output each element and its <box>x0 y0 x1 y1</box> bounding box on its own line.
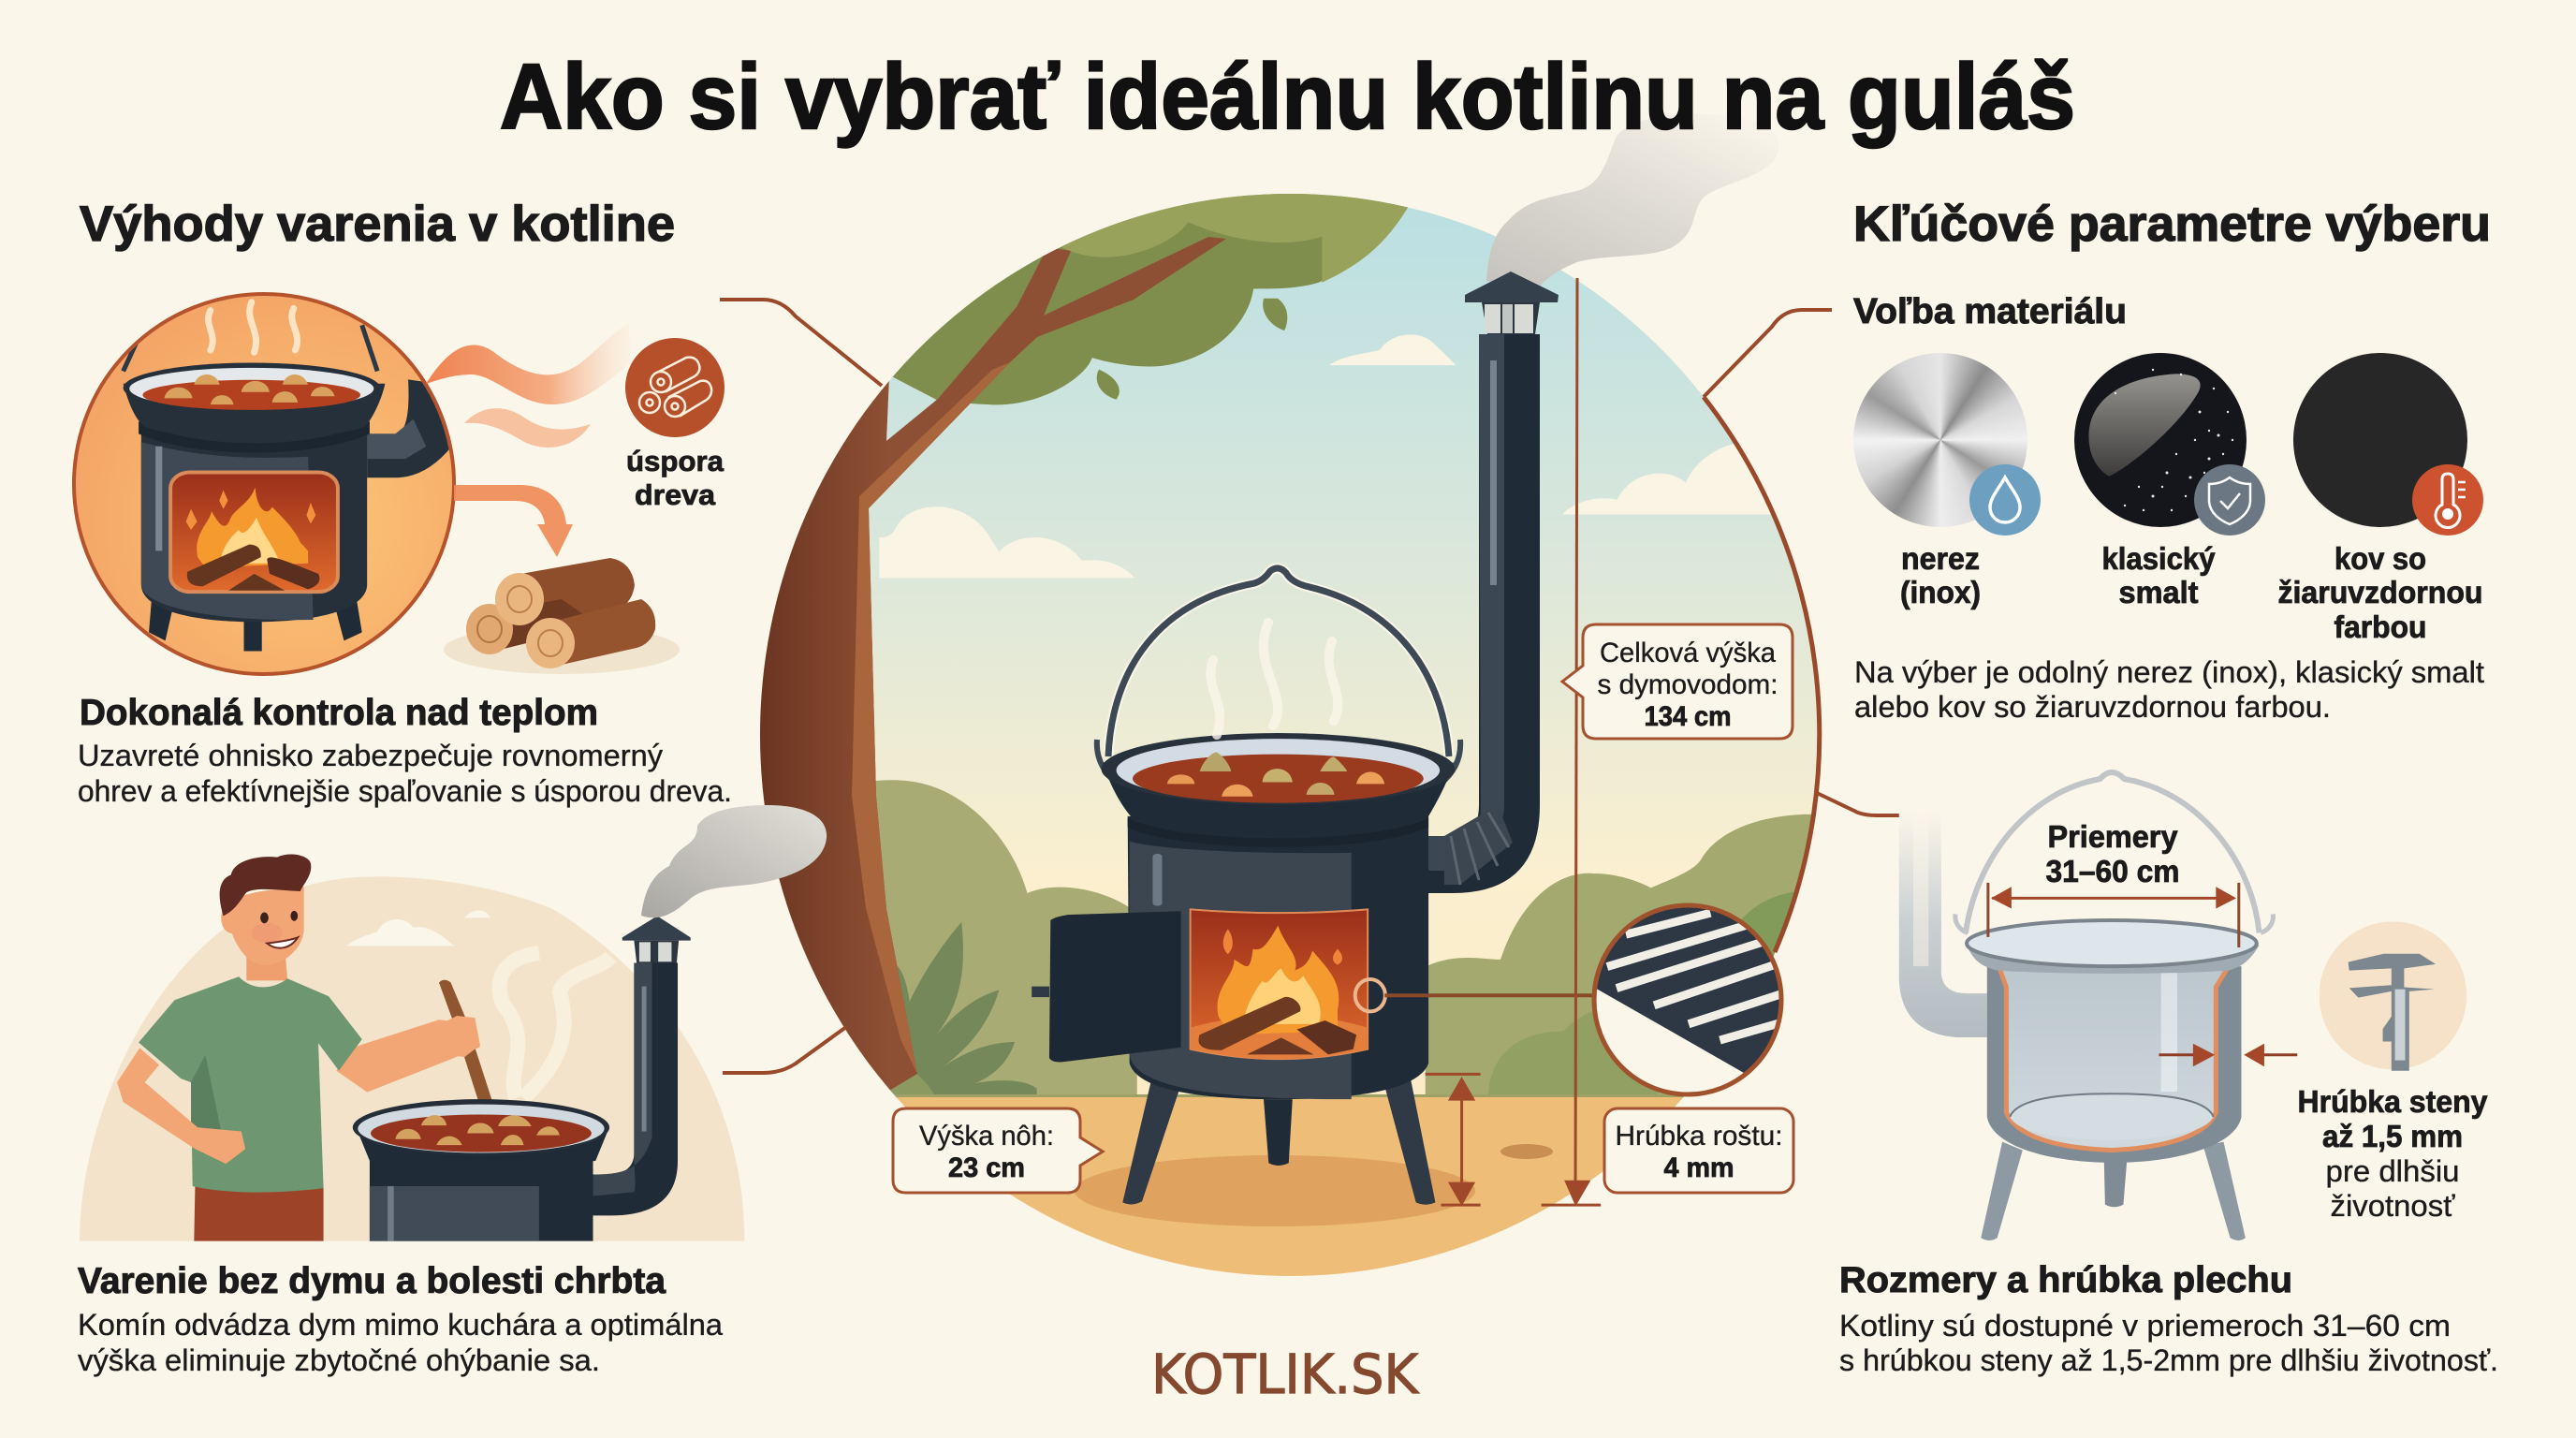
bail handle <box>1966 772 2260 932</box>
callout: grate thickness <box>1604 1108 1793 1193</box>
face <box>221 887 304 965</box>
text: heat control: Uzavreté ohnisko zabezpečuje rovnomerný <box>78 739 663 772</box>
legs <box>1981 1142 2246 1240</box>
bail handles <box>124 325 377 371</box>
label: wood saving: úspora <box>626 445 724 477</box>
labels: materials: kov so <box>2334 541 2426 576</box>
labels: materials: žiaruvzdornou <box>2278 575 2482 609</box>
tree canopy <box>889 188 1410 404</box>
backdrop dome <box>80 876 744 1241</box>
ghost chimney <box>1899 812 1987 1037</box>
chimney stub <box>367 379 452 477</box>
heading: heat control: Dokonalá kontrola nad teplom <box>80 693 598 733</box>
neck <box>246 946 287 980</box>
panel: central scene <box>720 114 1902 1284</box>
bowl <box>124 384 386 433</box>
heading: left column: Výhody varenia v kotline <box>80 197 675 252</box>
text: material choice: Na výber je odolný nerez (inox), klasický smalt <box>1854 655 2484 689</box>
icon: wood logs badge <box>625 338 724 437</box>
callout: leg height <box>893 1108 1103 1193</box>
shirt <box>139 976 362 1193</box>
callout: grate thickness: 4 mm <box>1664 1152 1734 1183</box>
callout: leg height: 23 cm <box>948 1152 1025 1183</box>
rim <box>124 363 378 393</box>
smoke: main chimney <box>1486 114 1778 290</box>
steam <box>209 302 298 352</box>
kettle <box>353 1099 609 1241</box>
label: diameters: 31–60 cm <box>2046 854 2179 888</box>
kettle handle <box>1097 568 1460 785</box>
cloud <box>346 910 490 946</box>
dimension: total height <box>1542 1181 1601 1205</box>
heading: material choice: Voľba materiálu <box>1853 292 2127 331</box>
badge: shield <box>2194 464 2265 536</box>
title: Ako si vybrať ideálnu kotlinu na guláš <box>500 45 2075 148</box>
material: heat-resistant paint <box>2293 353 2483 536</box>
text: smoke-free cooking: výška eliminuje zbytočné ohýbanie sa. <box>78 1343 600 1377</box>
text: heat control: ohrev a efektívnejšie spaľovanie s úsporou dreva. <box>78 774 732 808</box>
body <box>1987 966 2241 1163</box>
text: smoke-free cooking <box>78 1308 723 1377</box>
badge: water drop <box>1969 464 2041 536</box>
text: dimensions <box>1839 1309 2498 1377</box>
labels: materials <box>1900 541 2482 644</box>
grate detail lens <box>1591 902 1784 1097</box>
hair <box>220 855 311 916</box>
rim <box>1967 946 2260 974</box>
connector: materials <box>1704 310 1832 397</box>
material: stainless steel <box>1853 353 2041 536</box>
body <box>141 421 367 622</box>
callout: leg height: Výška nôh: <box>919 1121 1054 1152</box>
connector: dimensions <box>1817 793 1902 815</box>
heading: dimensions: Rozmery a hrúbka plechu <box>1839 1260 2292 1300</box>
label: wall thickness: pre dlhšiu <box>2325 1154 2460 1188</box>
steam <box>499 953 611 1098</box>
text: material choice: alebo kov so žiaruvzdornou farbou. <box>1854 690 2331 724</box>
labels: materials: (inox) <box>1900 575 1981 609</box>
left arm <box>117 1048 245 1164</box>
label: wood saving <box>626 445 724 511</box>
stove legs <box>1122 1074 1435 1205</box>
bushes <box>842 780 1845 1099</box>
firebox <box>1191 909 1368 1059</box>
label: wood saving: dreva <box>635 478 716 511</box>
dimension line: total height <box>1575 278 1577 1199</box>
kettle stove <box>1032 733 1601 1205</box>
illustration: heat control circle <box>74 294 454 674</box>
diagram: kettle cross-section <box>1899 772 2466 1240</box>
callout: total height: Celková výška <box>1600 638 1776 668</box>
hand <box>442 1016 480 1057</box>
scene: sky, tree and landscape circle <box>739 187 1845 1284</box>
cook <box>117 855 497 1241</box>
labels: materials: smalt <box>2119 575 2198 609</box>
label: wall thickness: Hrúbka steny <box>2297 1084 2488 1119</box>
flames <box>197 488 308 567</box>
callout: total height: 134 cm <box>1644 701 1732 732</box>
text: heat control <box>78 739 732 808</box>
wall-thickness arrows <box>2159 1044 2297 1066</box>
illustration: cook at the stove <box>80 855 744 1241</box>
vegetables <box>1167 753 1384 797</box>
illustration: log pile <box>444 558 680 674</box>
labels: materials: nerez <box>1901 541 1980 576</box>
text: dimensions: Kotliny sú dostupné v priemeroch 31–60 cm <box>1839 1309 2451 1343</box>
connector: smoke-free cooking <box>723 1027 846 1073</box>
right arm <box>336 1020 480 1093</box>
heat waves and arrow <box>426 323 631 557</box>
logs <box>1198 997 1300 1050</box>
rim <box>1102 733 1455 805</box>
label: diameters <box>2046 819 2179 888</box>
legs <box>149 601 362 652</box>
grate pointer <box>1355 979 1385 1011</box>
chimney <box>1428 271 1559 893</box>
badge: thermometer <box>2412 464 2483 536</box>
bowl <box>1103 762 1454 832</box>
labels: materials: klasický <box>2102 541 2216 576</box>
diameter dimension <box>1988 883 2239 947</box>
connector: heat control <box>720 300 882 386</box>
label: wall thickness <box>2297 1084 2488 1223</box>
callout: grate thickness: Hrúbka roštu: <box>1616 1121 1782 1152</box>
chimney <box>593 916 691 1215</box>
heading: smoke-free cooking: Varenie bez dymu a bolesti chrbta <box>78 1261 666 1301</box>
smoke: small chimney <box>641 805 827 917</box>
text: smoke-free cooking: Komín odvádza dym mimo kuchára a optimálna <box>78 1308 723 1342</box>
label: wall thickness: až 1,5 mm <box>2322 1119 2463 1153</box>
stove door <box>1049 911 1181 1062</box>
steam: kettle <box>1210 623 1338 735</box>
material: enamel <box>2074 353 2265 536</box>
callout: total height: s dymovodom: <box>1597 669 1778 700</box>
firebox window <box>170 472 338 592</box>
dimension: leg height <box>1426 1074 1481 1205</box>
icon: caliper badge <box>2320 921 2466 1071</box>
text: dimensions: s hrúbkou steny až 1,5-2mm pre dlhšiu životnosť. <box>1839 1343 2498 1377</box>
brand: KOTLIK.SK <box>1151 1343 1420 1406</box>
spoon <box>439 980 497 1118</box>
ground <box>896 1096 1684 1276</box>
labels: materials: farbou <box>2334 609 2426 644</box>
tree trunk and branches <box>739 237 1226 1096</box>
clouds <box>879 334 1778 578</box>
label: diameters: Priemery <box>2048 819 2178 854</box>
text: material choice <box>1854 655 2484 724</box>
stove body <box>1128 816 1428 1099</box>
logs <box>187 545 261 586</box>
label: wall thickness: životnosť <box>2331 1189 2456 1223</box>
connector: right arc outline <box>1704 397 1820 952</box>
flames <box>1218 926 1339 1034</box>
chimney cap <box>1465 271 1559 302</box>
trousers <box>194 1186 324 1241</box>
heading: right column: Kľúčové parametre výberu <box>1853 197 2491 252</box>
callout: total height <box>1562 624 1793 739</box>
